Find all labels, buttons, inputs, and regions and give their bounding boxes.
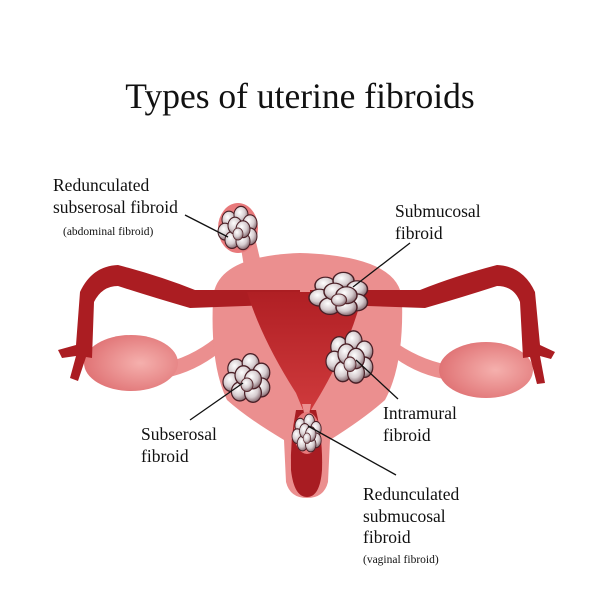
label: intramural: fibroid — [383, 425, 431, 445]
cervical canal — [291, 410, 322, 497]
vaginal fibroid — [292, 412, 321, 454]
label: pedunculated subserosal: Redunculated — [53, 175, 149, 195]
label: submucosal — [395, 201, 481, 243]
uterine cavity — [247, 292, 363, 410]
label: subserosal: fibroid — [141, 446, 189, 466]
label: pedunculated submucosal: submucosal — [363, 506, 446, 526]
leader lines — [185, 215, 410, 475]
left ovary — [84, 335, 178, 391]
subserosal fibroid — [223, 354, 270, 402]
uterus body — [213, 253, 402, 498]
pedunculated subserosal fibroid — [218, 203, 258, 253]
intramural fibroid — [326, 331, 373, 383]
label: pedunculated submucosal — [363, 484, 459, 566]
title: Types of uterine fibroids — [125, 76, 475, 116]
ovary ligaments — [160, 338, 455, 380]
stalk of pedunculated fibroid — [240, 242, 264, 279]
label: submucosal: Submucosal — [395, 201, 481, 221]
label: pedunculated subserosal: (abdominal fibroid) — [63, 226, 154, 238]
label: pedunculated subserosal: subserosal fibroid — [53, 197, 178, 217]
uterus illustration — [58, 203, 555, 498]
label: pedunculated submucosal: (vaginal fibroid) — [363, 554, 439, 566]
label: subserosal: Subserosal — [141, 424, 217, 444]
label: pedunculated subserosal — [53, 175, 178, 238]
label: pedunculated submucosal: fibroid — [363, 527, 411, 547]
label: intramural: Intramural — [383, 403, 457, 423]
submucosal fibroid — [309, 272, 368, 316]
right ovary — [439, 342, 533, 398]
label: submucosal: fibroid — [395, 223, 443, 243]
label: pedunculated submucosal: Redunculated — [363, 484, 459, 504]
label: subserosal — [141, 424, 217, 466]
left fallopian tube — [58, 265, 300, 381]
label: intramural — [383, 403, 457, 445]
right fallopian tube — [310, 265, 555, 384]
